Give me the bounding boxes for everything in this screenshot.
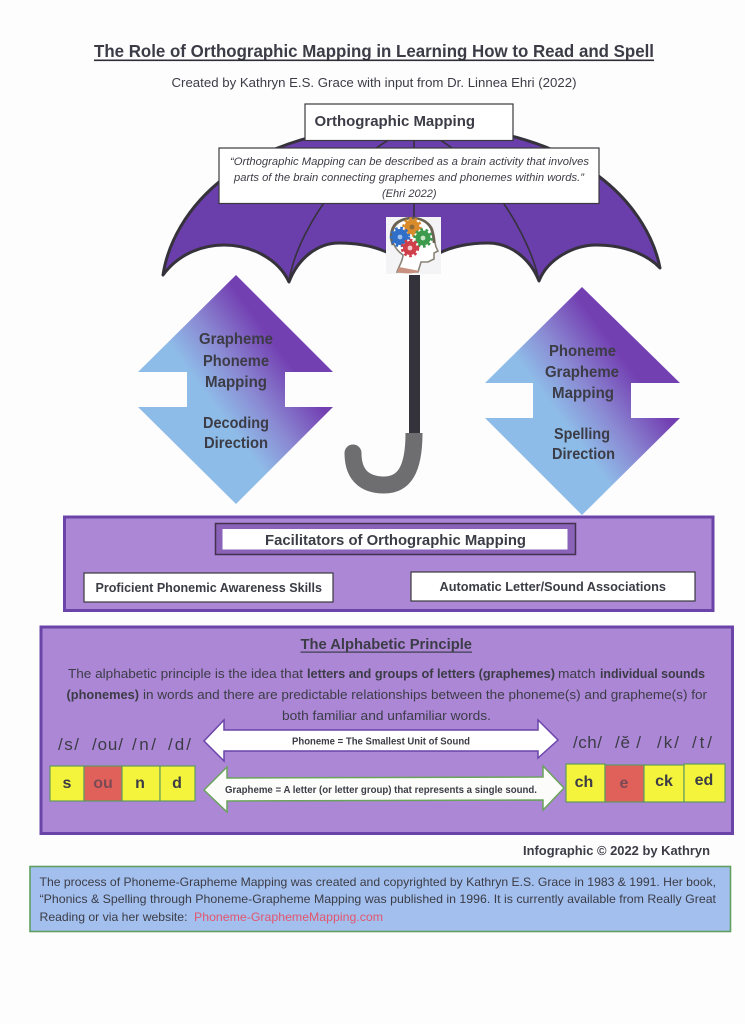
double arrow: phoneme grapheme spelling [485, 287, 680, 515]
umbrella canopy [163, 125, 660, 282]
umbrella handle [344, 433, 414, 485]
paragraph [66, 667, 707, 723]
panel: about the process [30, 866, 730, 932]
word tiles: checked: ed [695, 772, 713, 789]
paragraph: (phonemes) [66, 688, 139, 702]
title: The Role of Orthographic Mapping in Learning How to Read and Spell [94, 41, 654, 61]
heading: alphabetic principle: The Alphabetic Principle [300, 637, 472, 653]
left word phonemes: /ou/ [92, 735, 123, 754]
word tiles: sound: s [63, 775, 72, 792]
link: Phoneme-GraphemeMapping.com [194, 910, 383, 924]
word tiles: sound: ou [93, 775, 113, 792]
heading: facilitators: Facilitators of Orthographic Mapping [265, 533, 526, 549]
paragraph: match [558, 667, 596, 681]
panel: about the process: The process of Phoneme-Grapheme Mapping was created and copyrighted by Kathryn E.S. Grace in 1983 & 1991. Her book, [40, 875, 716, 889]
double arrow: grapheme phoneme decoding: Decoding [203, 415, 269, 432]
word tiles: checked [566, 764, 725, 802]
arrow: phoneme definition [204, 720, 558, 761]
word tiles: sound: n [135, 775, 145, 792]
quote box: parts of the brain connecting graphemes and phonemes within words.” [233, 172, 585, 184]
paragraph: in words and there are predictable relationships between the phoneme(s) and grapheme(s) for [143, 688, 707, 702]
double arrow: phoneme grapheme spelling: Phoneme [549, 343, 616, 360]
double arrow: grapheme phoneme decoding: Grapheme [199, 331, 273, 348]
umbrella shaft [409, 275, 420, 435]
paragraph: both familiar and unfamiliar words. [282, 709, 491, 723]
icon: head with gears [386, 217, 441, 274]
panel: alphabetic principle [41, 627, 732, 834]
paragraph: letters and groups of letters (graphemes) [307, 667, 555, 681]
left word phonemes: /n/ [132, 735, 156, 754]
facilitator: letter sound associations [411, 572, 695, 601]
word tiles: checked: e [620, 775, 629, 792]
quote box [219, 148, 599, 204]
paragraph: The alphabetic principle is the idea that [68, 667, 304, 681]
arrow: grapheme definition [204, 766, 564, 812]
double arrow: phoneme grapheme spelling: Grapheme [545, 364, 619, 381]
double arrow: grapheme phoneme decoding: Mapping [205, 374, 267, 391]
facilitator: phonemic awareness [84, 573, 333, 602]
gear: blue [391, 228, 409, 246]
word tiles: sound [50, 766, 195, 801]
left word phonemes: /d/ [168, 735, 191, 754]
box: Orthographic Mapping: Orthographic Mapping [314, 113, 475, 130]
panel: about the process: “Phonics & Spelling through Phoneme-Grapheme Mapping was published in 1996. It is currently available from Really Great [40, 892, 717, 906]
double arrow: grapheme phoneme decoding: Direction [204, 435, 268, 452]
facilitator: phonemic awareness: Proficient Phonemic Awareness Skills [96, 581, 322, 595]
right word phonemes: /ĕ / [615, 733, 641, 752]
panel: facilitators [64, 517, 713, 610]
left word phonemes: /s/ [58, 735, 79, 754]
quote box: (Ehri 2022) [382, 188, 437, 200]
gear: green [414, 230, 432, 246]
double arrow: phoneme grapheme spelling: Direction [552, 446, 615, 463]
double arrow: phoneme grapheme spelling: Spelling [554, 426, 610, 443]
word tiles: sound: d [172, 775, 182, 792]
gear: orange [404, 218, 420, 236]
double arrow: grapheme phoneme decoding: Phoneme [203, 353, 269, 370]
right word phonemes: /k/ [657, 733, 679, 752]
double arrow: phoneme grapheme spelling: Mapping [552, 385, 614, 402]
word tiles: checked: ch [575, 774, 593, 791]
box: Orthographic Mapping [305, 104, 513, 140]
paragraph: individual sounds [600, 667, 705, 681]
right word phonemes: /ch/ [573, 733, 602, 752]
arrow: phoneme definition: Phoneme = The Smallest Unit of Sound [292, 736, 470, 748]
right word phonemes [573, 733, 712, 752]
word tiles: checked: ck [655, 773, 673, 790]
heading: facilitators [216, 524, 576, 554]
left word phonemes [58, 735, 191, 754]
infographic credit: Infographic © 2022 by Kathryn [523, 844, 710, 858]
panel: about the process: Reading or via her website: [40, 910, 188, 924]
arrow: grapheme definition: Grapheme = A letter (or letter group) that represents a single sound. [225, 784, 537, 796]
gear: red [402, 240, 418, 256]
facilitator: letter sound associations: Automatic Letter/Sound Associations [440, 580, 666, 594]
subtitle: Created by Kathryn E.S. Grace with input from Dr. Linnea Ehri (2022) [172, 75, 576, 90]
quote box: “Orthographic Mapping can be described as a brain activity that involves [230, 156, 590, 168]
double arrow: grapheme phoneme decoding [138, 275, 333, 504]
right word phonemes: /t/ [692, 733, 712, 752]
